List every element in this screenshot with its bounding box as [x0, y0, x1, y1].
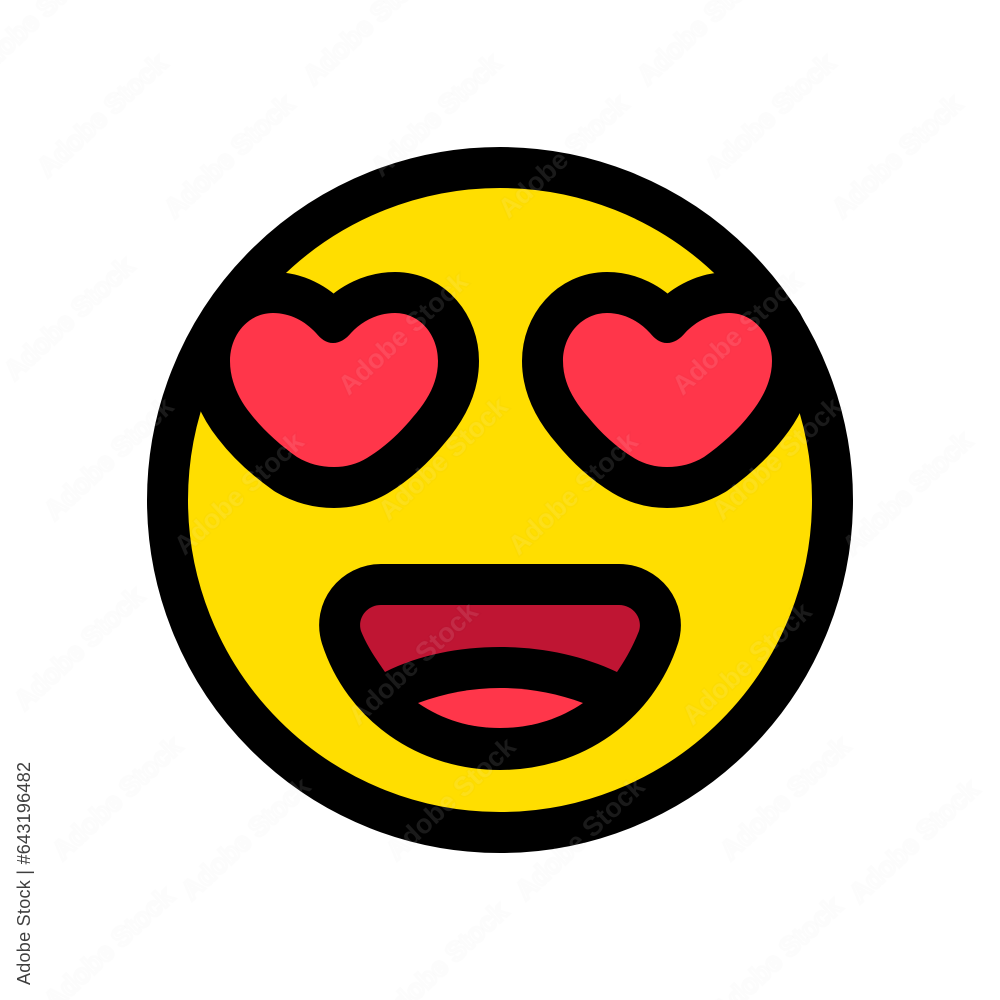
watermark pattern: Adobe Stock [31, 48, 173, 183]
watermark pattern: Adobe Stock [175, 771, 317, 906]
stock id caption: Adobe Stock | #643196482 [14, 762, 34, 985]
watermark pattern: Adobe Stock [158, 89, 300, 224]
mouth interior [360, 605, 640, 672]
watermark pattern: Adobe Stock [826, 89, 968, 224]
watermark pattern: Adobe Stock [380, 731, 522, 866]
watermark pattern: Adobe Stock [706, 391, 848, 526]
mouth outline [360, 605, 640, 729]
watermark pattern: Adobe Stock [0, 251, 140, 386]
watermark pattern: Adobe Stock [843, 774, 985, 909]
emoji face [168, 168, 832, 832]
watermark pattern: Adobe Stock [168, 426, 310, 561]
watermark pattern: Adobe Stock [332, 266, 474, 401]
watermark pattern: Adobe Stock [492, 89, 634, 224]
watermark pattern: Adobe Stock [502, 426, 644, 561]
icon: right heart eye [563, 313, 772, 467]
watermark pattern: Adobe Stock [38, 391, 180, 526]
watermark pattern: Adobe Stock [365, 48, 507, 183]
watermark pattern: Adobe Stock [676, 596, 818, 731]
watermark pattern: Adobe Stock [8, 581, 150, 716]
watermark pattern: Adobe Stock [46, 731, 188, 866]
tongue [418, 688, 583, 728]
watermark pattern: Adobe Stock [714, 731, 856, 866]
watermark pattern: Adobe Stock [836, 426, 978, 561]
watermark pattern: Adobe Stock [699, 48, 841, 183]
watermark pattern: Adobe Stock [509, 771, 651, 906]
face circle [168, 168, 832, 832]
watermark pattern: Adobe Stock [372, 391, 514, 526]
mouth [360, 605, 640, 729]
watermark pattern: Adobe Stock [666, 266, 808, 401]
icon: left heart eye [230, 313, 438, 467]
watermark pattern: Adobe Stock [342, 596, 484, 731]
